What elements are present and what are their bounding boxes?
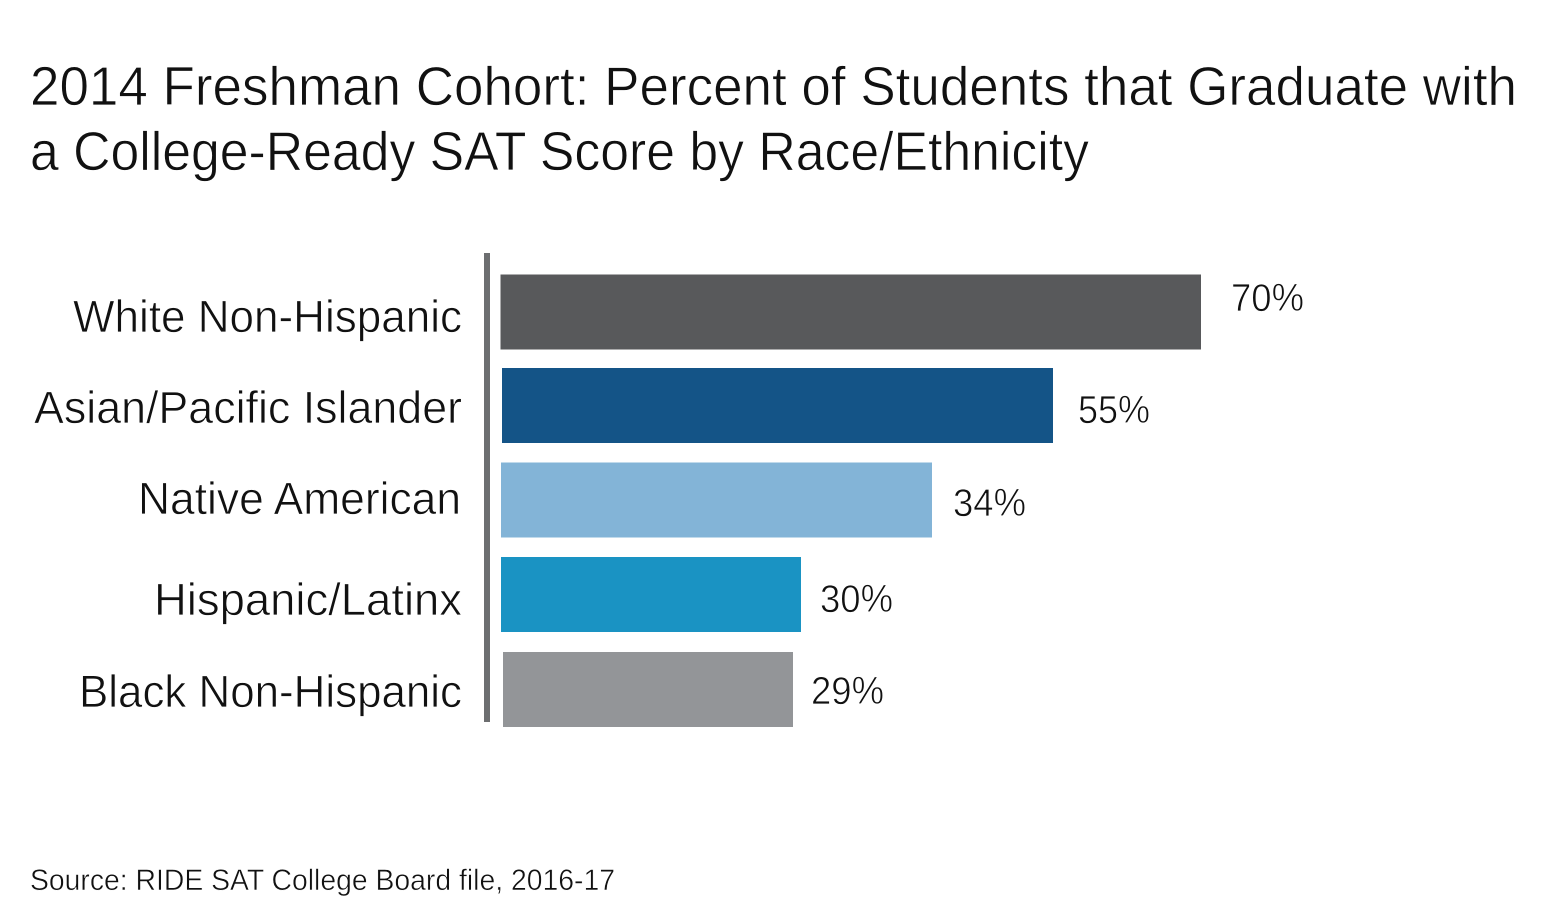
category labels: Asian/Pacific Islander xyxy=(34,382,462,433)
category labels xyxy=(34,291,463,717)
axis line xyxy=(484,253,490,722)
category labels: Hispanic/Latinx xyxy=(154,574,463,625)
title: a College-Ready SAT Score by Race/Ethnicity xyxy=(30,120,1089,182)
category labels: Native American xyxy=(138,473,461,524)
category labels: White Non-Hispanic xyxy=(73,291,462,342)
title xyxy=(30,55,1517,182)
value labels: 34% xyxy=(953,482,1026,525)
value labels xyxy=(811,277,1304,713)
source note: Source: RIDE SAT College Board file, 2016-17 xyxy=(30,864,615,897)
value labels: 30% xyxy=(820,578,893,621)
value labels: 70% xyxy=(1231,277,1304,320)
bars xyxy=(500,274,1201,727)
value labels: 55% xyxy=(1078,389,1150,432)
value labels: 29% xyxy=(811,670,884,713)
title: 2014 Freshman Cohort: Percent of Students that Graduate with xyxy=(30,55,1517,117)
category labels: Black Non-Hispanic xyxy=(79,666,462,717)
